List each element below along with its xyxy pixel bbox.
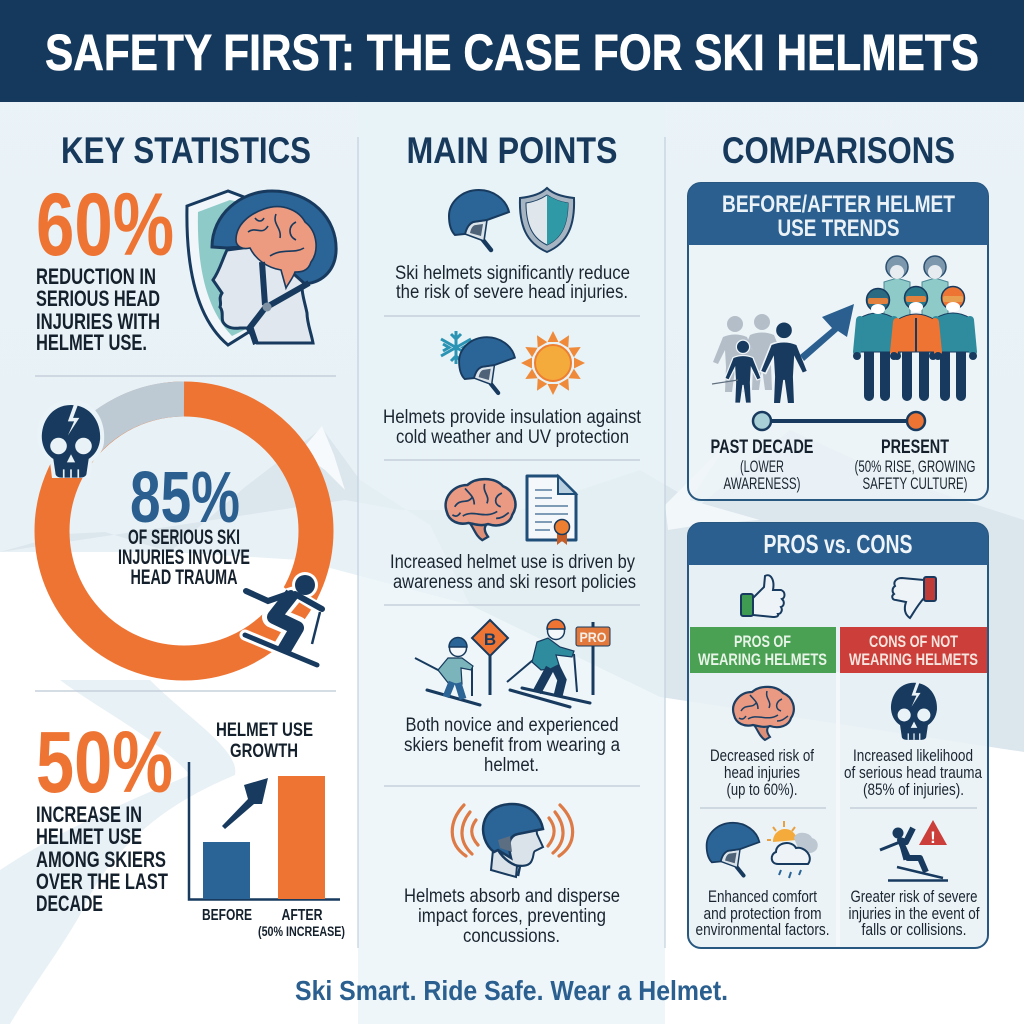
bar chart: helmet use growth xyxy=(189,720,345,939)
cons header: WEARING HELMETS xyxy=(849,650,978,669)
icon: helmet absorbing impact xyxy=(452,804,573,877)
text: point 5: Helmets absorb and disperse xyxy=(404,886,620,907)
separator xyxy=(836,672,840,946)
text: enhanced comfort: Enhanced comfort xyxy=(708,888,817,906)
text: increased likelihood: (85% of injuries). xyxy=(863,781,964,799)
text: point 3 xyxy=(390,552,636,593)
panel: key statistics xyxy=(36,130,336,355)
text: point 4 xyxy=(404,715,620,776)
text: greater risk xyxy=(848,888,980,939)
cons header: CONS OF NOT xyxy=(869,632,958,651)
text: point 5: concussions. xyxy=(463,926,560,947)
bar labels: BEFORE xyxy=(202,907,252,924)
icon: helmet xyxy=(707,823,759,876)
panel heading: PROS vs. CONS xyxy=(764,529,912,559)
pros header: WEARING HELMETS xyxy=(698,650,827,669)
icon: brain xyxy=(446,479,515,540)
footer tagline: Ski Smart. Ride Safe. Wear a Helmet. xyxy=(295,975,728,1006)
icon: novice skier and sign xyxy=(415,620,508,705)
text: greater risk: injuries in the event of xyxy=(848,905,980,923)
text: decreased risk: Decreased risk of xyxy=(710,747,814,765)
icon: snowflake xyxy=(441,331,471,364)
label: present xyxy=(854,437,976,493)
text: point 2 xyxy=(383,407,642,448)
chart title: GROWTH xyxy=(230,741,298,762)
text: increased likelihood: of serious head trauma xyxy=(844,764,983,782)
column dividers xyxy=(358,137,665,948)
arrow: growth xyxy=(222,778,268,829)
text: enhanced comfort: environmental factors. xyxy=(696,921,830,939)
icon: sun xyxy=(521,331,585,395)
label: past decade: (LOWER xyxy=(740,458,784,476)
stat: 85 percent: 85% xyxy=(130,458,240,538)
divider xyxy=(35,375,336,377)
stat: 50 percent: 50% xyxy=(36,714,173,811)
text: 60 percent description xyxy=(36,264,160,355)
panel heading: BEFORE/AFTER HELMET xyxy=(722,191,955,218)
front row centre xyxy=(890,286,942,396)
text: 85 percent description: HEAD TRAUMA xyxy=(130,566,238,589)
donut chart: 85 percent xyxy=(37,399,322,665)
panel heading xyxy=(722,191,955,242)
text: decreased risk: head injuries xyxy=(724,764,800,782)
text: enhanced comfort xyxy=(696,888,830,939)
bar labels: AFTER xyxy=(282,907,323,924)
icon: expert skier and sign: PRO xyxy=(580,629,607,645)
label: past decade: AWARENESS) xyxy=(724,475,800,493)
icon: people present with helmets xyxy=(853,256,977,396)
text: point 5 xyxy=(404,886,620,947)
text: 50 percent description: DECADE xyxy=(36,891,103,916)
text: greater risk: falls or collisions. xyxy=(862,921,966,939)
front row right xyxy=(929,286,977,396)
panel: main points xyxy=(383,130,642,947)
divider xyxy=(35,690,336,692)
heading: main points: MAIN POINTS xyxy=(406,130,618,171)
text: point 5: impact forces, preventing xyxy=(418,906,606,927)
panel: before/after helmet use trends xyxy=(688,183,988,500)
icon: thumbs down xyxy=(892,577,936,618)
chart title: HELMET USE xyxy=(216,720,313,741)
icon: shield xyxy=(520,188,574,252)
panel: pros vs cons xyxy=(688,523,988,948)
heading: key statistics: KEY STATISTICS xyxy=(61,130,311,171)
panel heading: USE TRENDS xyxy=(778,215,900,242)
text: 85 percent description: INJURIES INVOLVE xyxy=(118,546,250,569)
icon: people past without helmets xyxy=(712,314,808,404)
front row left xyxy=(853,288,901,396)
label: present: SAFETY CULTURE) xyxy=(862,475,968,493)
icon: skull xyxy=(891,682,937,740)
icon: sun and cloud xyxy=(767,821,818,878)
text: 85 percent description xyxy=(118,526,250,589)
header banner xyxy=(0,0,1024,102)
icon: expert skier and sign xyxy=(507,620,610,707)
text: enhanced comfort: and protection from xyxy=(704,905,822,923)
icon: skier xyxy=(245,572,322,665)
bar: before xyxy=(203,842,250,899)
text: point 4: skiers benefit from wearing a xyxy=(404,735,620,756)
label: past decade: PAST DECADE xyxy=(710,437,814,458)
label: present: PRESENT xyxy=(881,437,949,458)
text: point 1: the risk of severe head injuries. xyxy=(396,282,628,303)
text: 50 percent description: INCREASE IN xyxy=(36,802,142,827)
text: 60 percent description: REDUCTION IN xyxy=(36,264,156,289)
text: point 2: cold weather and UV protection xyxy=(396,427,629,448)
text: decreased risk xyxy=(710,747,814,799)
pros header: PROS OF xyxy=(734,632,791,651)
icon: helmet head with shield xyxy=(187,191,336,345)
bar labels: (50% INCREASE) xyxy=(258,924,345,939)
heading: comparisons: COMPARISONS xyxy=(722,130,955,171)
chart title xyxy=(216,720,313,762)
text: greater risk: Greater risk of severe xyxy=(850,888,978,906)
icon: document with seal xyxy=(527,476,576,545)
text: increased likelihood: Increased likelihood xyxy=(853,747,973,765)
icon: helmet xyxy=(449,190,509,250)
text: 50 percent description xyxy=(36,802,168,916)
back row xyxy=(884,256,948,320)
text: 50 percent description: AMONG SKIERS xyxy=(36,847,166,872)
icon: novice skier and sign: B xyxy=(484,630,496,649)
text: 60 percent description: HELMET USE. xyxy=(36,330,147,355)
bar: after xyxy=(278,776,325,899)
stat: 60 percent: 60% xyxy=(36,174,174,274)
pros header xyxy=(690,627,836,673)
text: point 3: awareness and ski resort policies xyxy=(393,572,636,593)
icon: helmet xyxy=(459,337,515,393)
text: point 3: Increased helmet use is driven by xyxy=(390,552,635,573)
text: 85 percent description: OF SERIOUS SKI xyxy=(128,526,240,549)
text: 60 percent description: INJURIES WITH xyxy=(36,309,160,334)
text: point 1 xyxy=(395,263,630,303)
text: 60 percent description: SERIOUS HEAD xyxy=(36,286,160,311)
text: decreased risk: (up to 60%). xyxy=(726,781,798,799)
text: increased likelihood xyxy=(844,747,983,799)
icon: thumbs up xyxy=(741,575,784,617)
icon: falling skier with warning: ! xyxy=(930,828,936,847)
icon: brain xyxy=(733,687,794,740)
text: point 1: Ski helmets significantly reduce xyxy=(395,263,630,284)
text: point 4: helmet. xyxy=(484,755,539,776)
text: point 2: Helmets provide insulation against xyxy=(383,407,642,428)
label: present: (50% RISE, GROWING xyxy=(854,458,976,476)
text: 50 percent description: OVER THE LAST xyxy=(36,869,168,894)
arrow: trend upward xyxy=(800,304,854,361)
timeline xyxy=(753,412,925,430)
text: 50 percent description: HELMET USE xyxy=(36,824,142,849)
icon: skull xyxy=(37,400,104,478)
text: point 4: Both novice and experienced xyxy=(406,715,618,736)
bar labels xyxy=(202,907,345,939)
label: past decade xyxy=(710,437,814,493)
icon: falling skier with warning xyxy=(880,820,948,880)
cons header xyxy=(840,627,987,673)
